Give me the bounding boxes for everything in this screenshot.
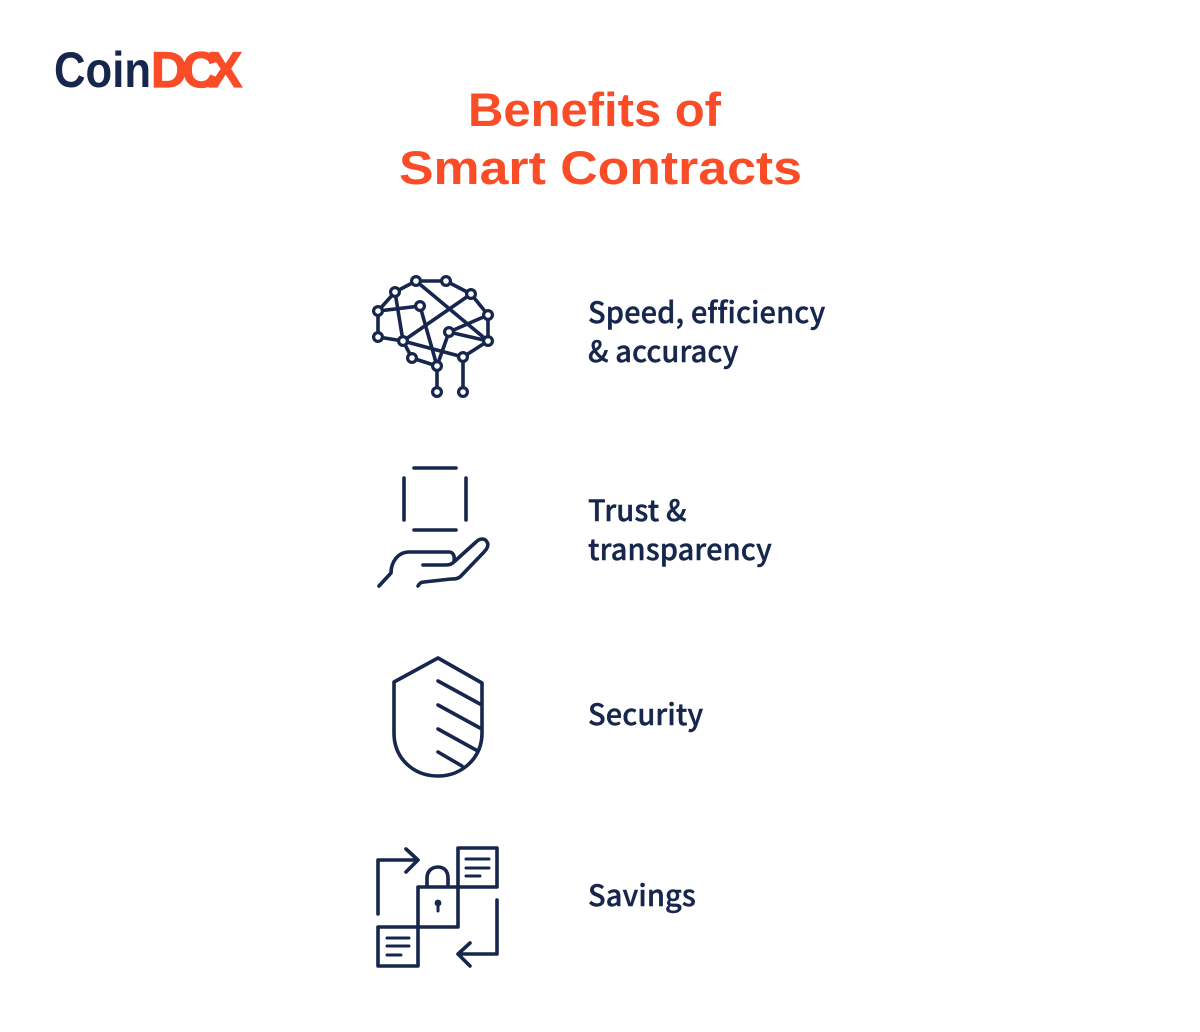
label: trust and transparency: transparency: [588, 527, 772, 569]
icon: lock and documents exchange: [378, 848, 497, 966]
title: Smart Contracts: [399, 141, 802, 194]
label: trust and transparency: [588, 488, 772, 569]
icon: shield: [394, 658, 482, 776]
logo: CoinDCX: DCX: [151, 42, 242, 98]
logo: CoinDCX: [54, 42, 242, 98]
label: speed, efficiency and accuracy: & accuracy: [588, 329, 739, 371]
label: security: Security: [588, 692, 703, 734]
label: speed, efficiency and accuracy: Speed, efficiency: [588, 290, 826, 332]
icon: brain network: [374, 277, 492, 396]
title: Benefits of: [468, 83, 721, 136]
icon: hand holding square: [379, 468, 488, 586]
logo: CoinDCX: Coin: [54, 42, 151, 98]
label: speed, efficiency and accuracy: [588, 290, 826, 371]
title: [399, 83, 802, 194]
label: trust and transparency: Trust &: [588, 488, 687, 530]
label: savings: Savings: [588, 873, 696, 915]
